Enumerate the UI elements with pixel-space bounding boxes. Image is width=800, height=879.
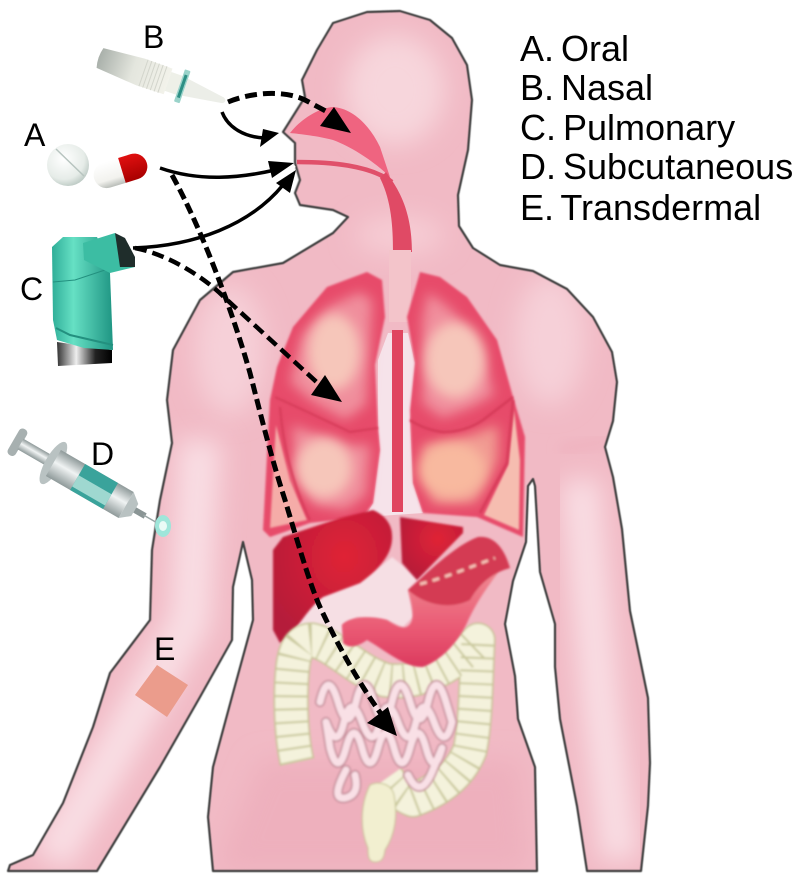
- left lung: [263, 272, 385, 537]
- legend: list of routes: D. Subcutaneous: [520, 146, 793, 187]
- label: A: A: [24, 117, 46, 153]
- label: C: C: [20, 271, 43, 307]
- small intestine: [320, 685, 452, 798]
- right lung: [407, 272, 525, 537]
- icon: transdermal patch: [135, 665, 188, 717]
- arrow: oral dashed route to intestine: [172, 175, 397, 736]
- large intestine: [291, 640, 478, 862]
- icon: tablet: [47, 144, 89, 186]
- label: B: B: [143, 19, 164, 55]
- arrow: pulmonary dashed route to lungs: [135, 248, 342, 402]
- icon: nasal spray: [93, 41, 231, 117]
- stomach: [342, 537, 510, 667]
- pale abdomen cavity: [285, 557, 417, 650]
- legend: list of routes: C. Pulmonary: [520, 107, 735, 148]
- label: D: D: [91, 436, 114, 472]
- arrow: pulmonary solid route: [133, 170, 296, 248]
- legend: list of routes: A. Oral: [520, 28, 629, 69]
- human body silhouette: [8, 11, 650, 871]
- icon: inhaler: [52, 233, 135, 366]
- arrow: nasal dashed route to nasal cavity: [228, 93, 351, 133]
- arrow: nasal solid route: [222, 112, 279, 147]
- nasal cavity: [290, 107, 390, 177]
- icon: syringe: [2, 419, 172, 545]
- legend: list of routes: B. Nasal: [520, 67, 653, 108]
- liver: [273, 510, 463, 643]
- arrow: oral solid route: [160, 161, 295, 181]
- legend: list of routes: E. Transdermal: [520, 187, 761, 228]
- label: E: E: [154, 631, 175, 667]
- trachea: [297, 162, 423, 517]
- legend: list of routes: [520, 28, 793, 228]
- icon: capsule: [90, 150, 151, 191]
